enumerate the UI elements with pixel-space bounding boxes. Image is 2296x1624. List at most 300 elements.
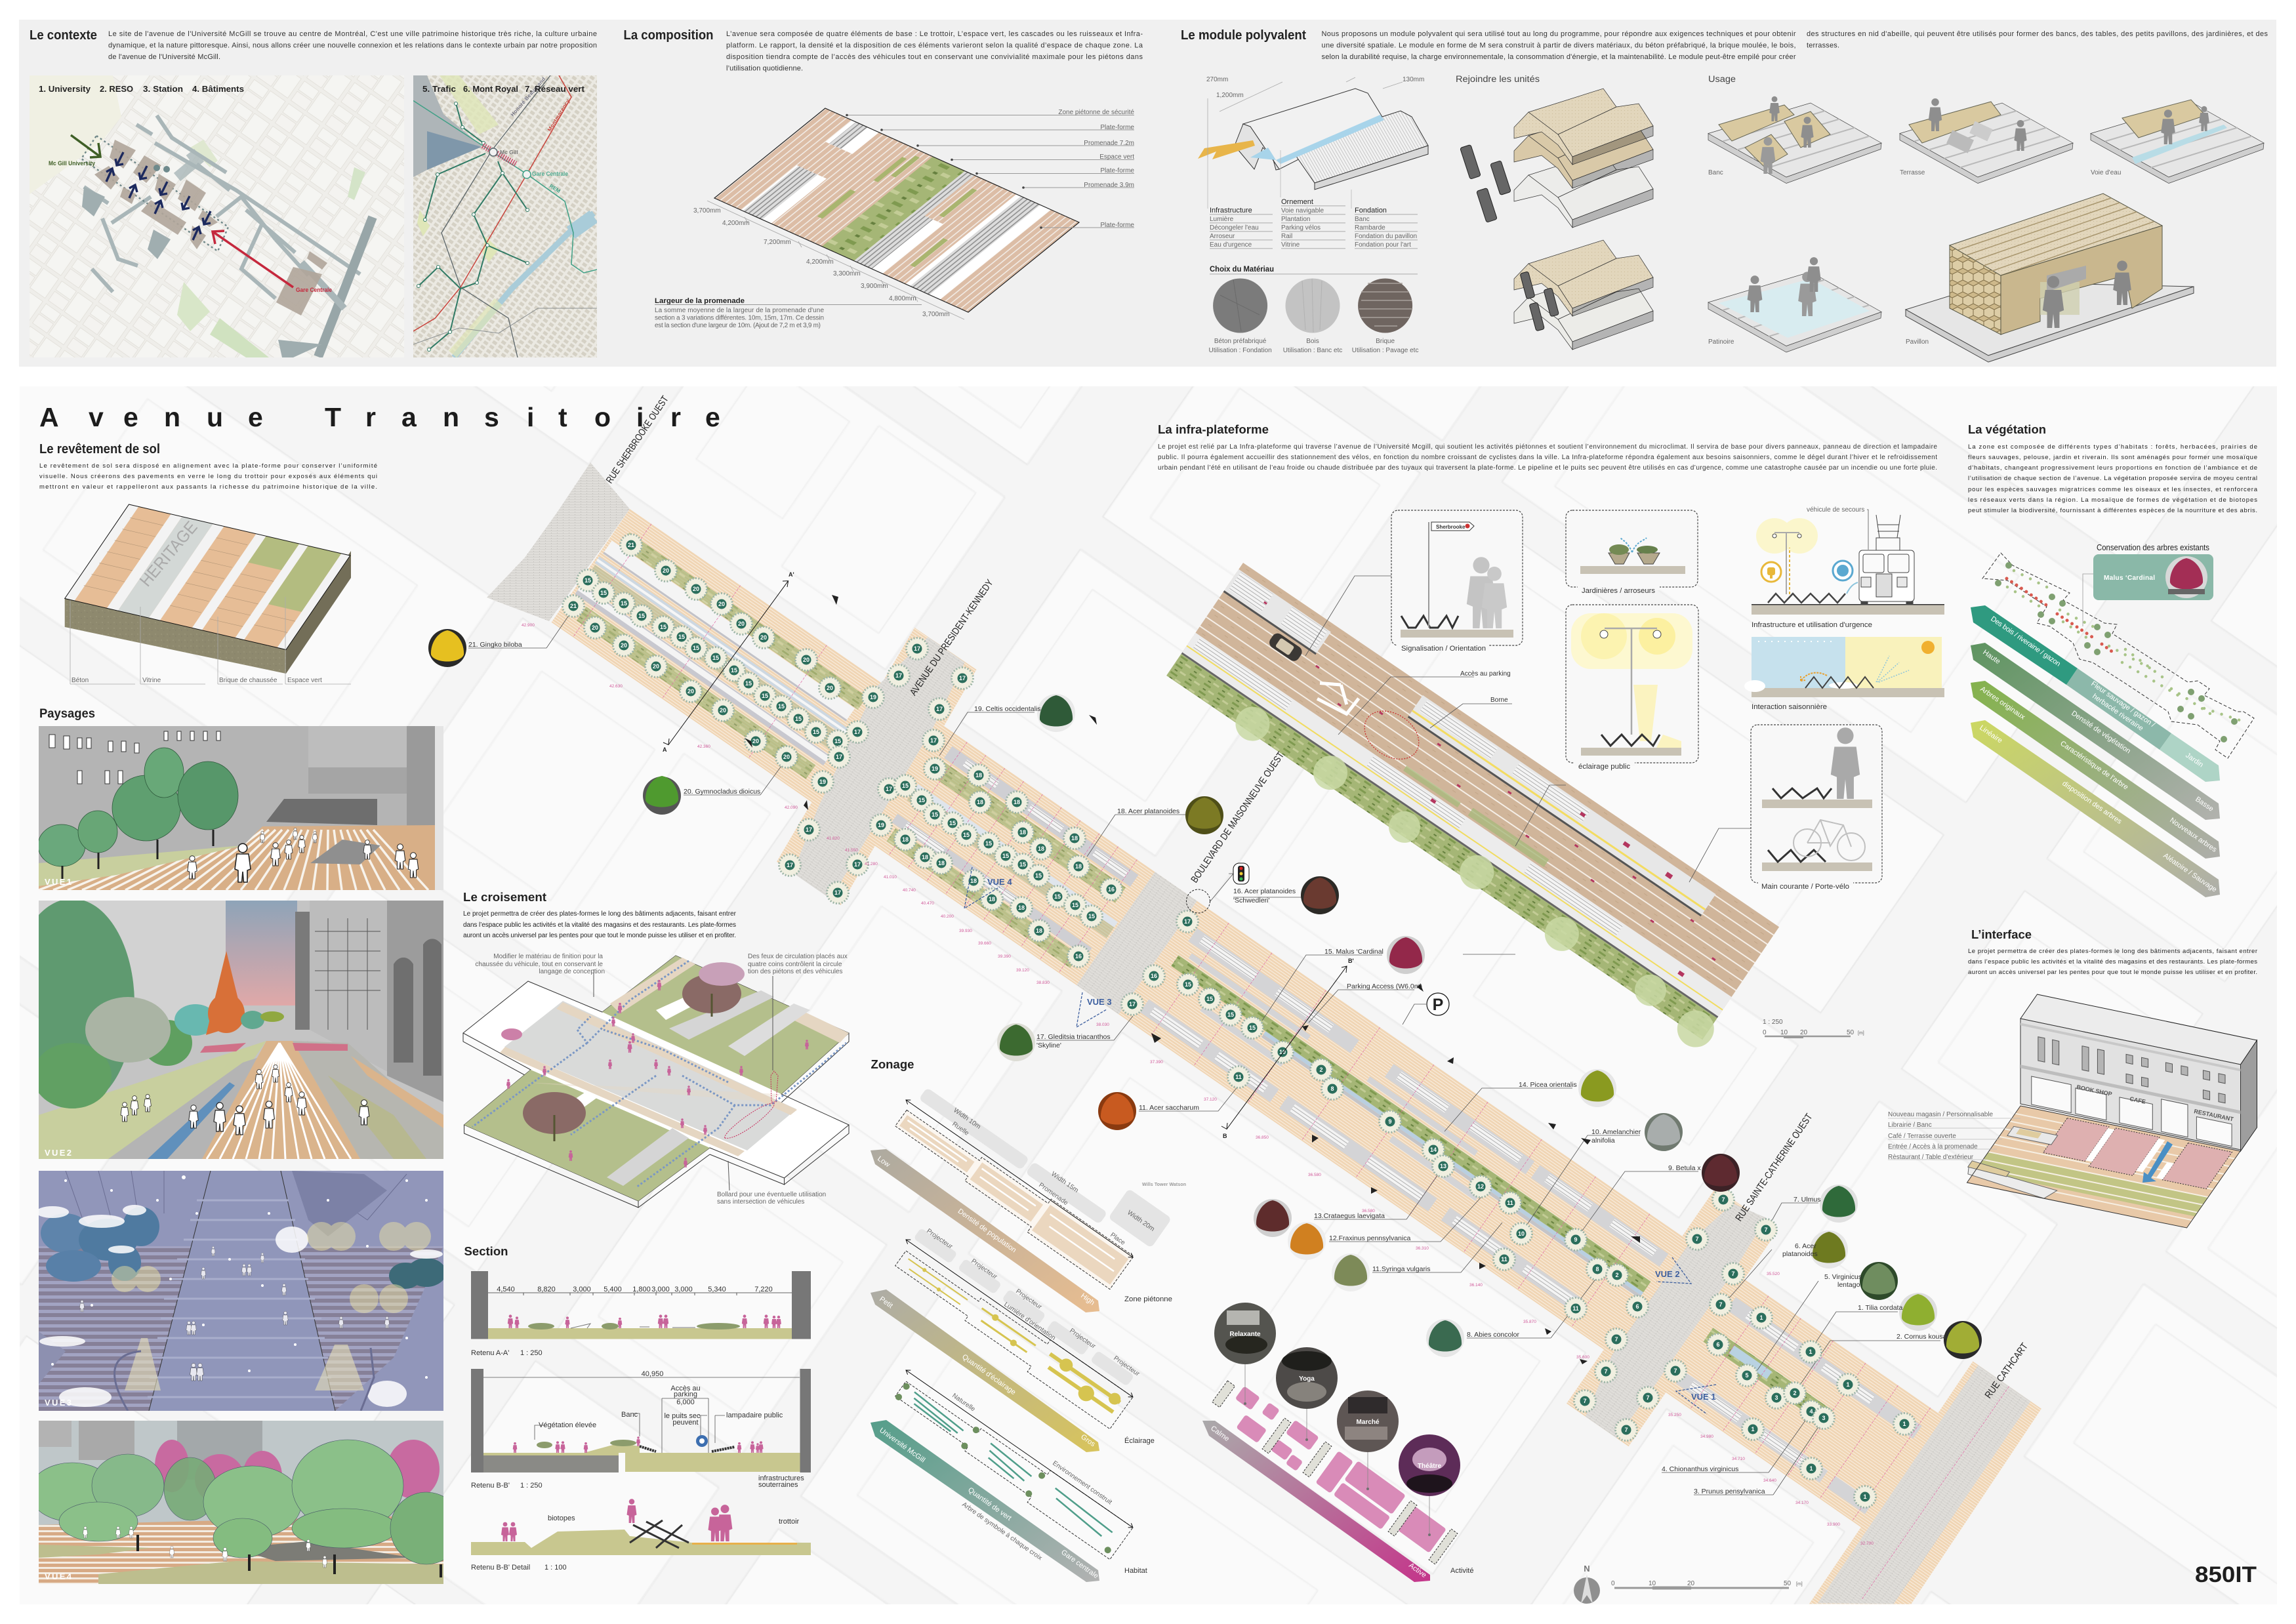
elevation labels: 39.660 xyxy=(978,941,991,946)
city blocks background xyxy=(20,386,2277,1604)
diagram: interface building: Librairie / Banc xyxy=(1888,1122,1932,1129)
arrows: parking access xyxy=(1312,674,1359,718)
markers: tree numbers: 15 xyxy=(731,667,737,674)
markers: tree numbers: 16 xyxy=(1108,886,1115,893)
image: VUE4 xyxy=(30,1421,462,1584)
markers: tree numbers: 10 xyxy=(1279,1049,1286,1055)
section drawing A-A: Retenu A-A' xyxy=(471,1349,509,1357)
text: croisement: dans l’espace public les activités et la vitalité des magasins et des restaurants. Les plate-formes xyxy=(463,922,736,929)
markers: tree numbers: 20 xyxy=(621,642,627,649)
cross street: Sainte-Catherine xyxy=(1567,1188,1778,1446)
plaza: Sherbrooke xyxy=(487,462,630,621)
zoning: population density: Width 20m xyxy=(1126,1209,1156,1233)
text: contexte: de l'avenue de l'Université McGill. xyxy=(108,53,220,61)
street names xyxy=(604,394,2030,1400)
elevation labels: 41.010 xyxy=(884,875,897,880)
ribbon: vegetation density: Densité de végétation xyxy=(2070,710,2132,756)
markers: tree numbers: 17 xyxy=(895,672,902,679)
elevation labels: 39.930 xyxy=(959,929,972,933)
street names: Wills Tower Watson xyxy=(1142,1183,1186,1187)
ribbon: vegetation density: Basse xyxy=(2194,796,2215,813)
inset: main courante xyxy=(1751,725,1882,891)
materials: Utilisation : Banc etc xyxy=(1283,347,1342,354)
markers: tree numbers: 15 xyxy=(693,645,699,651)
markers: tree numbers: 7 xyxy=(1646,1394,1650,1401)
text: croisement xyxy=(463,910,737,939)
zoning: population density: Width 10m xyxy=(952,1106,982,1131)
callouts: plant photos and names: 2. Cornus kousa xyxy=(1896,1333,1947,1341)
diagram: infrastructure et urgence xyxy=(1752,506,1944,629)
elevation labels: 37.390 xyxy=(1150,1060,1163,1065)
zoning: population density: Low xyxy=(876,1155,892,1169)
zoning: lighting xyxy=(871,1225,1155,1452)
heading: La vegetation: La végétation xyxy=(1968,423,2046,436)
heading: revetement: Le revêtement de sol xyxy=(39,442,160,457)
markers: tree numbers: 1 xyxy=(1863,1493,1867,1500)
elevation labels: 35.250 xyxy=(1668,1413,1681,1417)
zoning: activity: Calme xyxy=(1209,1425,1231,1443)
diagram: usage examples: Usage xyxy=(1708,74,1736,84)
section drawing B-B detail: trottoir xyxy=(779,1518,800,1526)
zoning: lighting: Lumière d'orientation xyxy=(1002,1301,1057,1342)
diagram: joining units xyxy=(1456,74,1653,350)
markers: tree numbers xyxy=(563,534,1916,1507)
diagram: composition axonometric: 4,200mm xyxy=(806,258,834,266)
elevation labels: 39.120 xyxy=(1016,968,1029,973)
plan: avenue xyxy=(499,456,2046,1624)
markers: tree numbers: 6 xyxy=(1716,1341,1720,1348)
markers: tree numbers: 14 xyxy=(1430,1147,1437,1153)
diagram: composition axonometric: Promenade 7.2m xyxy=(1084,140,1134,147)
map: transit and green network: Montmorency xyxy=(546,98,571,132)
markers: tree numbers: 9 xyxy=(1574,1236,1578,1243)
callouts: plant photos and names: 6. Acer xyxy=(1795,1242,1816,1250)
section drawing B-B: Banc xyxy=(621,1411,638,1419)
usage: banc: Banc xyxy=(1708,169,1723,176)
diagram: composition axonometric: Zone piétonne de sécurité xyxy=(1058,109,1134,116)
text: module xyxy=(1321,30,2268,61)
text: module: une diversité spatiale. Le module en forme de M sera construit à partir de divers matériaux, du béton préfabriqué, la brique moulée, le bois, xyxy=(1321,42,1796,50)
markers: tree numbers: 20 xyxy=(653,663,659,670)
diagram: composition axonometric xyxy=(693,108,1134,319)
map: network and buildings: Gare Centrale xyxy=(296,287,332,294)
text: composition xyxy=(726,30,1143,72)
callouts: plant photos and names: 'Schwedleri' xyxy=(1233,897,1269,904)
markers: tree numbers: 6 xyxy=(1635,1303,1639,1310)
callouts: plant photos and names: platanoides xyxy=(1782,1250,1818,1258)
image: VUE4: VUE4 xyxy=(45,1572,72,1581)
dashed oval: borne xyxy=(1355,701,1428,769)
materials: Béton préfabriqué xyxy=(1214,338,1267,345)
cross street: President-Kennedy xyxy=(760,627,994,906)
markers: tree numbers: 18 xyxy=(902,836,909,843)
markers: tree numbers: 15 xyxy=(963,832,970,838)
photo: Marche xyxy=(1337,1391,1399,1452)
icon: parking: P xyxy=(1433,996,1443,1014)
markers: tree numbers: 2 xyxy=(1319,1066,1323,1073)
section drawing B-B detail xyxy=(471,1499,811,1572)
markers: tree numbers: 15 xyxy=(834,738,841,744)
diagram: module unit: 1,200mm xyxy=(1216,92,1244,99)
text: vegetation: fleurs sauvages, pelouse, jardin et riverain. Ils sont aménagés pour former une mosaïque xyxy=(1968,454,2257,461)
diagram: composition axonometric: Plate-forme xyxy=(1100,124,1134,131)
elevation labels: 35.600 xyxy=(1576,1355,1589,1360)
text: croisement: Le projet permettra de créer des plates-formes le long des bâtiments adjacents, faisant entrer xyxy=(463,910,737,918)
table: infrastructure / ornement / fondation: Arroseur xyxy=(1210,233,1235,240)
text: interface xyxy=(1968,948,2257,976)
inset: eclairage xyxy=(1566,605,1698,771)
image: VUE3: VUE3 xyxy=(45,1398,72,1408)
image: VUE2 xyxy=(10,899,443,1159)
text: vegetation: pour les espèces sauvages migratrices comme les oiseaux et les insectes, et renforcera xyxy=(1968,486,2258,493)
zoning: habitat xyxy=(871,1368,1147,1582)
diagram: interface building: RESTAURANT xyxy=(2194,1108,2234,1123)
zoning: lighting: Projecteur xyxy=(1014,1288,1043,1311)
elevation labels: 35.520 xyxy=(1767,1272,1780,1276)
materials: Choix du Matériau xyxy=(1210,266,1274,274)
ribbon: tree layout: Linéaire xyxy=(1978,724,2003,745)
map: network and buildings: 2. RESO xyxy=(100,85,133,94)
table: infrastructure / ornement / fondation: Fondation pour l'art xyxy=(1355,241,1411,249)
ribbon: tree layout xyxy=(1971,720,2220,897)
markers: tree numbers: 15 xyxy=(660,624,666,630)
ribbon: tree character: Nouveaux arbres xyxy=(2168,817,2219,854)
markers: tree numbers: 21 xyxy=(570,603,577,609)
section drawing A-A xyxy=(471,1271,811,1357)
section drawing A-A: 3,000 xyxy=(651,1286,670,1293)
elevation labels: 40.200 xyxy=(941,914,954,919)
markers: tree numbers: 12 xyxy=(1477,1183,1484,1190)
view labels: VUE 1 xyxy=(1691,1392,1716,1402)
zoning: population density: Zone piétonne xyxy=(1124,1295,1172,1303)
annotation: material: Modifier le matériau de finition pour la xyxy=(493,953,603,960)
north arrow: N xyxy=(1584,1564,1590,1573)
table: infrastructure / ornement / fondation: Fondation xyxy=(1355,207,1387,214)
markers: tree numbers: 18 xyxy=(975,772,982,779)
panel: main board xyxy=(10,386,2277,1624)
zoning: activity xyxy=(1202,1303,1473,1582)
section drawing B-B: 40,950 xyxy=(642,1370,663,1378)
diagram: joining units: Rejoindre les unités xyxy=(1456,74,1540,84)
markers: tree numbers: 15 xyxy=(813,729,819,735)
text: largeur de la promenade: Largeur de la promenade xyxy=(655,297,745,305)
diagram: usage examples xyxy=(1708,74,2264,362)
photo: Yoga xyxy=(1276,1347,1338,1409)
callouts: plant photos and names: 9. Betula x xyxy=(1668,1164,1701,1172)
inset: signalisation: Sherbrooke xyxy=(1436,524,1466,530)
markers: tree numbers: 15 xyxy=(949,820,956,826)
map: transit and green network: 5. Trafic xyxy=(422,85,456,94)
image: VUE1: VUE1 xyxy=(45,877,72,887)
elevation labels: 34.640 xyxy=(1763,1478,1776,1483)
inset: signalisation: Signalisation / Orientation xyxy=(1401,645,1486,653)
zoning: lighting: Petit xyxy=(878,1295,894,1310)
callouts: plant photos and names: 10. Amelanchier xyxy=(1591,1128,1641,1136)
diagram: composition axonometric: Espace vert xyxy=(1099,153,1134,161)
ribbon: habitat type: Des bois / riveraine / gazon xyxy=(1989,615,2062,668)
arrows: vegetation gradients xyxy=(1971,605,2220,897)
elevation labels: 34.170 xyxy=(1795,1501,1809,1505)
markers: tree numbers: 15 xyxy=(1227,1011,1234,1018)
zoning: habitat: Naturelle xyxy=(951,1392,977,1413)
diagram: interface building: Entrée / Accès à la promenade xyxy=(1888,1143,1978,1150)
diagram: infrastructure et urgence: véhicule de secours xyxy=(1807,506,1864,514)
markers: tree numbers: 20 xyxy=(687,688,694,695)
diagram: composition axonometric: Promenade 3.9m xyxy=(1084,182,1134,189)
heading: infra-plateforme: La infra-plateforme xyxy=(1158,423,1269,436)
zoning: population density: Densité de population xyxy=(956,1208,1017,1254)
section drawing A-A: 1,800 xyxy=(632,1286,651,1293)
arrow: McGill xyxy=(71,135,100,157)
table: infrastructure / ornement / fondation: Décongeler l'eau xyxy=(1210,224,1259,232)
scale bar: lower: [m] xyxy=(1796,1582,1803,1587)
map: network and buildings xyxy=(30,75,404,357)
section markers A and B xyxy=(663,571,1354,1139)
markers: tree numbers: 20 xyxy=(760,634,767,641)
markers: tree numbers: 16 xyxy=(1075,953,1082,960)
ribbon: habitat type: herbacée riveraine xyxy=(2091,693,2144,733)
elevation labels: 38.030 xyxy=(1096,1023,1109,1027)
markers: tree numbers: 1 xyxy=(1751,1426,1755,1432)
elevation labels: 40.740 xyxy=(903,888,916,893)
panel: main board: Accès au parking xyxy=(1460,670,1511,678)
leader lines: callouts xyxy=(468,576,1940,1495)
usage: pavillon: Pavillon xyxy=(1906,338,1929,346)
markers: tree numbers: 13 xyxy=(1440,1163,1446,1169)
section drawing B-B: lampadaire public xyxy=(726,1411,783,1419)
map: transit and green network xyxy=(413,75,597,357)
heading: Le croisement: Le croisement xyxy=(463,890,546,904)
section drawing B-B detail: Retenu B-B' Detail xyxy=(471,1564,530,1572)
usage: terrasse: Terrasse xyxy=(1900,169,1925,176)
markers: tree numbers: 7 xyxy=(1764,1227,1768,1233)
table: infrastructure / ornement / fondation: Voie navigable xyxy=(1281,207,1324,214)
photo: Theatre xyxy=(1399,1434,1460,1496)
materials: Brique xyxy=(1376,338,1395,345)
text: croisement: auront un accès universel par les pentes pour que tout le monde puisse les utiliser et en profiter. xyxy=(463,932,736,939)
callouts: plant photos and names: 'Skyline' xyxy=(1036,1042,1061,1049)
view labels xyxy=(987,877,1716,1402)
callouts: plant photos and names: 16. Acer platanoides xyxy=(1233,887,1296,895)
markers: tree numbers: 2 xyxy=(1793,1390,1797,1396)
heading: Title: AvenueTransitoire xyxy=(39,402,720,432)
markers: tree numbers: 20 xyxy=(720,707,726,714)
zoning: lighting: Projecteur xyxy=(970,1257,998,1281)
elevation labels: 36.850 xyxy=(1256,1135,1269,1140)
section markers A and B: A xyxy=(663,746,667,753)
photo: Relaxante: Relaxante xyxy=(1229,1331,1261,1338)
infra-platform detail plan xyxy=(1159,563,1784,1054)
elevation labels: 37.120 xyxy=(1204,1097,1217,1102)
text: largeur de la promenade: est la section d'une largeur de 10m. (Ajout de 7,2 m et 3,9 m) xyxy=(655,322,821,329)
photo: Marche: Marché xyxy=(1356,1419,1380,1426)
scale bar: lower: 50 xyxy=(1784,1580,1792,1587)
diagram: composition axonometric: 3,900mm xyxy=(861,283,888,290)
markers: tree numbers: 15 xyxy=(584,577,591,584)
dashed circle: intersection xyxy=(1186,889,1210,913)
table: infrastructure / ornement / fondation: Infrastructure xyxy=(1210,207,1252,214)
markers: tree numbers: 1 xyxy=(1902,1421,1906,1427)
heading: L'interface: L’interface xyxy=(1971,928,2032,941)
text: revetement xyxy=(39,462,377,491)
table: infrastructure / ornement / fondation: Ornement xyxy=(1281,198,1313,206)
diagram: crossing axonometric xyxy=(463,953,849,1208)
usage: voie d'eau xyxy=(2091,100,2264,184)
markers: tree numbers: 18 xyxy=(977,799,983,805)
markers: tree numbers: 18 xyxy=(1075,863,1082,870)
markers: tree numbers: 15 xyxy=(1072,902,1078,908)
diagram: paving block: HERITAGE xyxy=(136,518,201,590)
inset: jardinieres: Jardinières / arroseurs xyxy=(1582,587,1656,595)
diagram: interface building: Nouveau magasin / Personnalisable xyxy=(1888,1111,1994,1118)
zoning: population density: Promenade xyxy=(1037,1181,1069,1207)
text: vegetation: peut stimuler la biodiversité, fournissant à différentes espèces de la nourriture et des abris. xyxy=(1968,507,2257,514)
markers: tree numbers: 1 xyxy=(1809,1465,1813,1472)
markers: tree numbers: 17 xyxy=(959,675,966,681)
elevation labels: 32.700 xyxy=(1860,1541,1874,1546)
table: infrastructure / ornement / fondation: Vitrine xyxy=(1281,241,1300,249)
annotation: material: chaussée du véhicule, tout en conservant le xyxy=(475,961,603,968)
arrow: Gare Centrale xyxy=(213,231,293,287)
heading: La composition: La composition xyxy=(623,28,714,43)
ribbon: habitat type: Fleur sauvage / gazon / xyxy=(2089,680,2157,729)
map: transit and green network: REM xyxy=(548,183,562,194)
diagram: module unit: 270mm xyxy=(1206,76,1228,83)
callouts: plant photos and names xyxy=(428,629,1982,1495)
street names: RUE SAINTE-CATHERINE OUEST xyxy=(1733,1112,1814,1223)
markers: tree numbers: 17 xyxy=(936,706,943,712)
text: infra-plateforme: urbain pendant l’été en utilisant de l’eau froide ou chaude distribuée par des tuyaux qui traversent la plate-forme. Le pipeline et le puits sec peuvent être utilisés en cas d’urgence, comme une catastrophe causée par un incendie ou une forte pluie. xyxy=(1158,464,1937,472)
diagram: module unit: 130mm xyxy=(1403,76,1424,83)
text: composition: disposition tiendra compte de l’accès des véhicules tout en conservant une convivialité maximale pour les piétons dans xyxy=(726,53,1143,61)
text: vegetation xyxy=(1968,443,2258,514)
callouts: plant photos and names: 19. Celtis occidentalis xyxy=(974,705,1041,713)
callouts: plant photos and names: 15. Malus ‘Cardinal xyxy=(1324,948,1384,956)
text: module: terrasses. xyxy=(1807,42,1839,50)
callouts: plant photos and names: 5. Virginicus xyxy=(1824,1273,1862,1281)
text: infra-plateforme: Le projet est relié par La Infra-plateforme qui traverse l’avenue de l’Université Mcgill, qui soutient les activités piétonnes et soutient l’environnement du microclimat. Il servira de base pour divers panneaux, panneau de direction et lampadaire xyxy=(1158,443,1937,451)
text: composition: l’utilisation quotidienne. xyxy=(726,64,803,72)
scale bar: upper: 50 xyxy=(1847,1029,1855,1036)
elevation lines xyxy=(539,473,2009,1600)
markers: tree numbers: 15 xyxy=(932,811,938,818)
table: infrastructure / ornement / fondation xyxy=(1208,150,1418,249)
markers: tree numbers: 15 xyxy=(778,703,785,710)
section 1 planting and strips xyxy=(562,526,872,784)
zoning: habitat: Université McGill xyxy=(878,1427,926,1464)
section drawing B-B detail: 1 : 100 xyxy=(544,1564,567,1572)
markers: tree numbers: 15 xyxy=(600,590,607,596)
text: largeur de la promenade: La somme moyenne de la largeur de la promenade d'une xyxy=(655,307,824,314)
diagram: tree conservation plan xyxy=(1982,553,2254,758)
zoning: lighting: Projecteur xyxy=(925,1227,954,1251)
markers: tree numbers: 15 xyxy=(762,693,768,699)
section drawing A-A: 5,400 xyxy=(604,1286,622,1293)
elevation labels: 38.830 xyxy=(1036,981,1050,985)
view labels: VUE 3 xyxy=(1087,997,1112,1007)
section drawing B-B: infrastructures xyxy=(758,1474,804,1482)
elevation labels: 35.870 xyxy=(1523,1320,1536,1324)
callouts: plant photos and names: 17. Gleditsia triacanthos xyxy=(1036,1033,1111,1041)
text: infra-plateforme xyxy=(1158,443,1937,472)
markers: tree numbers: 18 xyxy=(989,896,995,903)
section markers A and B: A' xyxy=(789,571,794,578)
diagram: composition axonometric: 3,300mm xyxy=(833,270,861,277)
project code: 850IT xyxy=(2195,1562,2257,1587)
markers: tree numbers: 17 xyxy=(836,754,842,760)
ribbon: tree layout: disposition des arbres xyxy=(2060,780,2123,826)
zoning: lighting: Gros xyxy=(1079,1433,1097,1449)
view labels: VUE 4 xyxy=(987,877,1012,887)
elevation labels: 41.280 xyxy=(865,862,878,866)
arrow: yellow flow xyxy=(1198,140,1255,159)
materials xyxy=(1209,266,1418,354)
inset: jardinieres xyxy=(1566,510,1698,595)
markers: tree numbers: 7 xyxy=(1624,1427,1628,1433)
map: transit and green network: Gare Centrale xyxy=(532,171,568,177)
markers: tree numbers: 18 xyxy=(938,860,945,866)
section drawing A-A: 4,540 xyxy=(497,1286,515,1293)
diagram: composition axonometric: 7,200mm xyxy=(764,239,791,246)
street names: AVENUE DU PRESIDENT-KENNEDY xyxy=(908,577,996,698)
section markers A and B: B xyxy=(1223,1133,1227,1139)
markers: tree numbers: 15 xyxy=(985,840,992,847)
markers: tree numbers: 17 xyxy=(854,861,861,868)
diagram: interface building: BOOK SHOP xyxy=(2076,1084,2112,1097)
ribbon: vegetation density: Haute xyxy=(1981,649,2001,666)
markers: tree numbers: 17 xyxy=(834,889,841,896)
markers: tree numbers: 20 xyxy=(693,586,699,592)
usage: terrasse xyxy=(1900,98,2073,184)
markers: tree numbers: 7 xyxy=(1731,1270,1735,1277)
photo: Relaxante xyxy=(1214,1303,1276,1364)
elevation labels: 39.390 xyxy=(998,954,1011,959)
markers: tree numbers: 7 xyxy=(1604,1368,1608,1375)
icon: traffic light xyxy=(1233,863,1249,884)
zoning: lighting: Quantité d'éclairage xyxy=(960,1353,1017,1396)
diagram: interface building xyxy=(1888,994,2257,1228)
text: infra-plateforme: public. Il pourra également accueillir des stationnement des vélos, en fonction du nombre croissant de cyclistes dans la ville. La Infra-plateforme répondra également aux besoins saisonniers, comme le dégel durant l’hiver et le refroidissement xyxy=(1158,454,1937,461)
elevation labels: 40.470 xyxy=(921,901,934,906)
callouts: plant photos and names: 11.Syringa vulgaris xyxy=(1372,1265,1431,1273)
map: network and buildings: Mc Gill University xyxy=(49,160,96,167)
map: transit and green network: 6. Mont Royal xyxy=(463,85,518,94)
scale bar: lower: 10 xyxy=(1649,1580,1656,1587)
markers: tree numbers: 15 xyxy=(918,797,925,803)
car xyxy=(1267,631,1304,663)
markers: tree numbers: 17 xyxy=(787,862,793,868)
annotation: bollard: sans intersection de véhicules xyxy=(717,1198,804,1206)
zoning: habitat: Arbre de symbole à chaque croix xyxy=(960,1501,1043,1562)
zoning: habitat: Habitat xyxy=(1124,1567,1147,1575)
elevation labels: 36.580 xyxy=(1308,1173,1321,1177)
section drawing A-A: 1 : 250 xyxy=(520,1349,543,1357)
callouts: plant photos and names: lentago xyxy=(1837,1281,1860,1289)
markers: tree numbers: 15 xyxy=(1088,913,1095,920)
zoning: lighting: Projecteur xyxy=(1068,1327,1097,1350)
callouts: plant photos and names: 12.Fraxinus pennsylvanica xyxy=(1329,1234,1410,1242)
diagram: paving block: Espace vert xyxy=(287,677,322,684)
section drawing A-A: 3,000 xyxy=(573,1286,591,1293)
diagram: composition axonometric: Plate-forme xyxy=(1100,167,1134,174)
markers: tree numbers: 19 xyxy=(870,694,876,700)
ribbon: tree character: Arbres originaux xyxy=(1978,685,2027,721)
ribbon: vegetation density xyxy=(1971,643,2220,820)
annotation: signals: quatre coins contrôlent la circule xyxy=(748,961,842,968)
markers: tree numbers: 15 xyxy=(902,782,909,789)
callouts: plant photos and names: 3. Prunus pensylvanica xyxy=(1694,1488,1765,1495)
text: interface: Le projet permettra de créer des plates-formes le long des bâtiments adjacents, faisant entrer xyxy=(1968,948,2257,955)
